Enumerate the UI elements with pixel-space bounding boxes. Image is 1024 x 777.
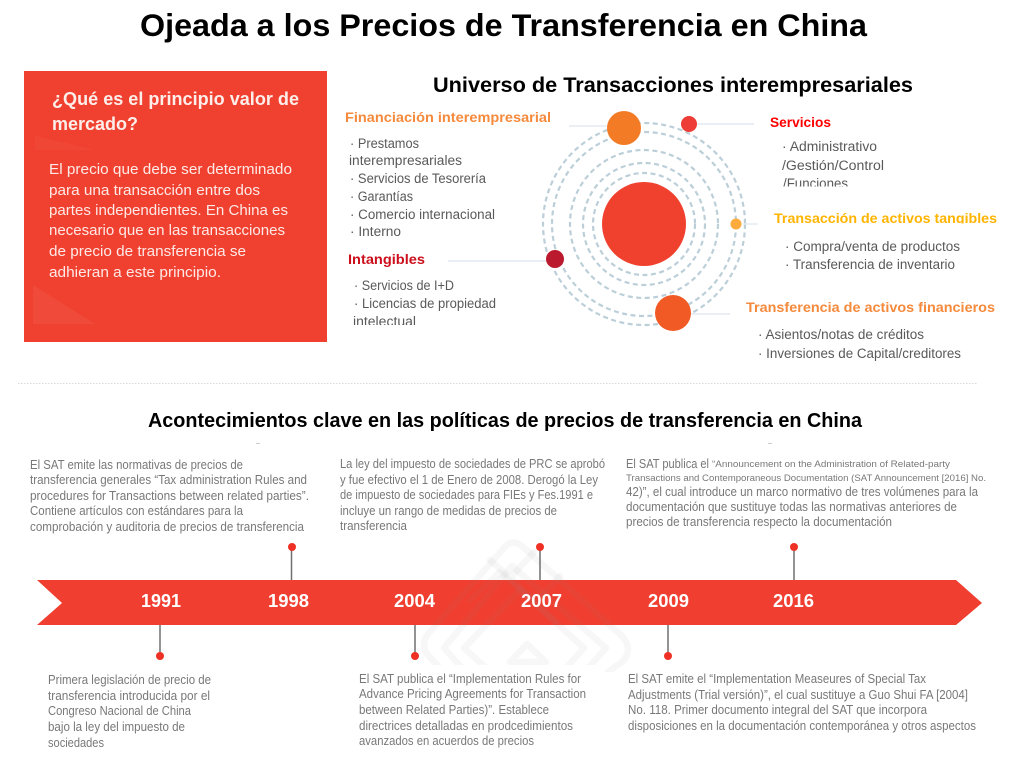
block: financiacion interempresarial: · Servicios de Tesorería <box>350 171 486 186</box>
text: 2004: Advance Pricing Agreements for Transaction <box>359 686 586 701</box>
text: 2007 <box>340 456 605 533</box>
text: 2004: avanzados en acuerdos de precios <box>359 733 534 748</box>
year labels <box>141 591 814 611</box>
panel heading: ¿Qué es el principio valor de <box>52 88 299 109</box>
text: 2009: disposiciones en la documentación contemporánea y otros aspectos <box>628 718 976 733</box>
block: financiacion interempresarial: · Garantías <box>350 189 413 204</box>
text: 2009: Adjustments (Trial versión)”, el cual sustituye a Guo Shui FA [2004] <box>628 687 968 702</box>
block: activos financieros: · Inversiones de Capital/creditores <box>758 346 961 361</box>
block: activos financieros: Transferencia de activos financieros <box>746 299 995 315</box>
text: 2007: La ley del impuesto de sociedades de PRC se aprobó <box>340 456 605 471</box>
text: 2016 <box>626 456 986 529</box>
block: activos tangibles <box>774 210 997 272</box>
text: 2016: precios de transferencia respecto la documentación <box>626 514 892 529</box>
text: 1998: Contiene artículos con estándares para la <box>30 503 244 518</box>
block: financiacion interempresarial: Financiación interempresarial <box>345 109 551 125</box>
panel body text: para una transacción entre dos <box>49 183 260 199</box>
text: 2009 <box>628 671 976 733</box>
block: intangibles <box>348 251 496 329</box>
year labels: 2004 <box>394 591 435 611</box>
text: 2009: El SAT emite el “Implementation Measeures of Special Tax <box>628 671 927 686</box>
text: 1991: transferencia introducida por el <box>48 688 210 703</box>
text: 2007: y fue efectivo el 1 de Enero de 2008. Derogó la Ley <box>340 472 599 487</box>
text: 2007: incluye un rango de medidas de precios de <box>340 503 557 518</box>
panel body text: de precio de transferencia se <box>49 244 246 260</box>
block: intangibles: · Licencias de propiedad <box>354 296 496 311</box>
panel body text: adhieran a este principio. <box>49 265 221 281</box>
text: 2007: de impuesto de sociedades para FIEs y Fes.1991 e <box>340 487 593 502</box>
text: 1991: Primera legislación de precio de <box>48 672 211 687</box>
text: 2004: El SAT publica el “Implementation Rules for <box>359 671 582 686</box>
block: activos tangibles: Transacción de activos tangibles <box>774 210 997 226</box>
text: 1991: Congreso Nacional de China <box>48 703 192 718</box>
year labels: 2007 <box>521 591 562 611</box>
block: intangibles: intelectual <box>353 314 416 329</box>
text: 1998: El SAT emite las normativas de precios de <box>30 457 243 472</box>
heading: acontecimientos clave: Acontecimientos clave en las políticas de precios de transferencia en China <box>148 410 863 432</box>
panel heading: mercado? <box>52 113 138 134</box>
text: 1991: bajo la ley del impuesto de <box>48 719 185 734</box>
block: intangibles: · Servicios de I+D <box>354 278 454 293</box>
block: intangibles: Intangibles <box>348 251 425 267</box>
title: Ojeada a los Precios de Transferencia en China <box>140 7 867 43</box>
text: 2004: between Related Parties)”. Establece <box>359 702 549 717</box>
panel: principio valor de mercado <box>24 71 327 342</box>
block: financiacion interempresarial: · Comercio internacional <box>350 207 495 222</box>
block: servicios: /Gestión/Control <box>782 158 884 173</box>
panel body text: El precio que debe ser determinado <box>49 162 292 178</box>
text: 2016: documentación que sustituye todas las normativas anteriores de <box>626 499 957 514</box>
milestone markers <box>156 543 798 660</box>
text: 2004 <box>359 671 586 748</box>
text: 2016: “Announcement on the Administration of Related-party <box>712 459 950 470</box>
text: 1998: comprobación y auditoria de precios de transferencia <box>30 519 305 534</box>
heading: universo de transacciones: Universo de Transacciones interempresariales <box>433 73 913 97</box>
block: financiacion interempresarial: interempresariales <box>349 153 462 168</box>
watermark logo <box>488 550 562 626</box>
text: 2016: El SAT publica el <box>626 456 709 471</box>
panel body text <box>49 162 292 281</box>
text: 1998 <box>30 457 309 534</box>
text: 2009: No. 118. Primer documento integral del SAT que incorpora <box>628 702 928 717</box>
block: activos tangibles: · Compra/venta de productos <box>785 239 960 254</box>
year labels: 1998 <box>268 591 309 611</box>
year labels: 2016 <box>773 591 814 611</box>
block: servicios: Servicios <box>770 114 831 130</box>
block: servicios: /Funciones <box>783 176 848 191</box>
panel body text: necesario que en las transacciones <box>49 223 285 239</box>
block: activos financieros: · Asientos/notas de créditos <box>758 327 924 342</box>
panel heading <box>52 88 299 134</box>
text: 1991: sociedades <box>48 735 104 750</box>
text: 1998: transferencia generales “Tax administration Rules and <box>30 472 307 487</box>
block: financiacion interempresarial: · Interno <box>350 224 401 239</box>
text: 1991 <box>48 672 211 750</box>
block: activos financieros <box>746 299 995 361</box>
timeline arrow <box>37 580 982 625</box>
text: 2007: transferencia <box>340 518 408 533</box>
year labels: 2009 <box>648 591 689 611</box>
year labels: 1991 <box>141 591 181 611</box>
block: financiacion interempresarial <box>345 109 551 239</box>
text: 1998: procedures for Transactions between related parties”. <box>30 488 309 503</box>
block: servicios <box>770 117 884 186</box>
text: 2016: Transactions and Contemporaneous Documentation (SAT Announcement [2016] No. <box>626 473 986 484</box>
text: 2004: directrices detalladas en prodcedimientos <box>359 718 573 733</box>
text: 2016: 42)”, el cual introduce un marco normativo de tres volúmenes para la <box>626 484 979 499</box>
orbit diagram <box>448 111 758 331</box>
block: activos tangibles: · Transferencia de inventario <box>785 257 955 272</box>
panel body text: partes independientes. En China es <box>49 203 288 219</box>
block: financiacion interempresarial: · Prestamos <box>350 136 419 151</box>
block: servicios: · Administrativo <box>782 139 877 154</box>
